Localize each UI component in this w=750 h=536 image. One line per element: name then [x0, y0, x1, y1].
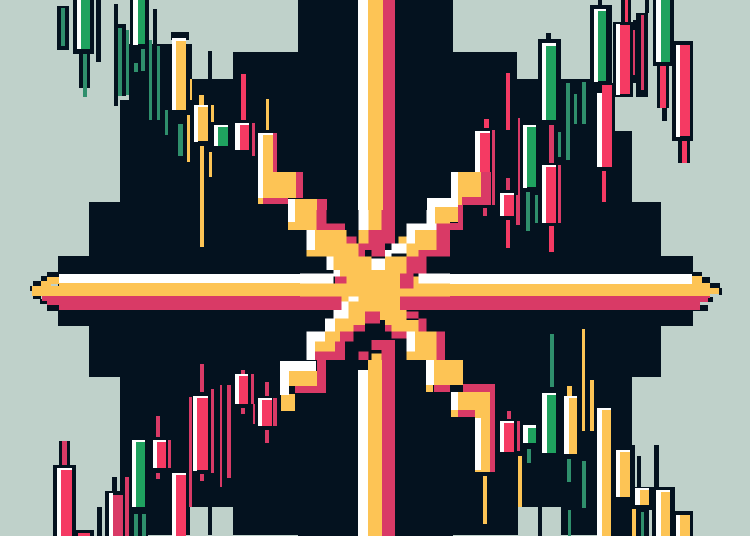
small red candle — [235, 74, 255, 156]
small outlined yellow candle — [632, 487, 655, 536]
small red candle — [500, 178, 520, 248]
green candle — [542, 334, 556, 453]
right green candle — [653, 0, 674, 121]
bottom row — [307, 332, 445, 360]
dark wicks — [96, 0, 157, 106]
outlined yellow candle — [653, 487, 675, 536]
yellow wick — [483, 476, 487, 524]
dark wicks at right — [632, 445, 659, 490]
yellow candle with long wick — [194, 95, 214, 247]
small muted green candle — [57, 6, 69, 50]
green wicks — [558, 82, 594, 160]
green candle — [132, 440, 146, 536]
candlesticks: lower left — [53, 364, 277, 536]
large green candle — [73, 0, 94, 97]
top row — [300, 210, 450, 230]
edge yellow candle — [675, 511, 693, 536]
yellow candle — [616, 450, 630, 497]
red candle — [105, 477, 129, 536]
candlesticks: upper left — [57, 0, 269, 247]
green candle — [130, 0, 149, 50]
yellow candle — [564, 329, 594, 536]
red candle — [542, 125, 561, 252]
dark wick — [208, 51, 212, 80]
tall lower red candle — [172, 473, 192, 536]
backdrop gaps at the bottom — [148, 507, 597, 536]
small red candle — [235, 370, 255, 424]
small red candle — [153, 416, 171, 479]
green candle — [523, 125, 538, 231]
yellow wick — [518, 456, 522, 507]
vertical bar: bottom — [358, 340, 395, 536]
tall red candle at edge — [53, 441, 76, 536]
upper red candle — [613, 0, 649, 97]
vertical bar: top — [358, 0, 395, 232]
central starburst — [300, 210, 450, 360]
large right red candle — [672, 41, 693, 163]
small red candle — [258, 382, 277, 443]
upper band — [307, 230, 450, 257]
tall red candle — [590, 83, 615, 202]
red candle with side wicks — [189, 364, 231, 487]
large green candle — [538, 33, 561, 125]
arrow arm: lower right staircase — [426, 360, 495, 472]
arrow arm: upper left staircase — [258, 133, 327, 230]
middle band — [300, 257, 450, 297]
horizontal bar: right — [400, 272, 722, 311]
lower thin wicks — [632, 509, 652, 536]
candlesticks: upper right — [500, 0, 693, 252]
dark wick — [97, 507, 102, 536]
candlesticks: lower right — [483, 329, 693, 536]
arrow arm: upper right staircase — [427, 119, 495, 230]
small red candle — [500, 411, 520, 452]
green wicks — [134, 40, 183, 156]
tiny red candle — [76, 530, 94, 536]
yellow wick — [266, 99, 269, 130]
top green candle — [590, 0, 612, 83]
small green candle — [523, 425, 536, 463]
small green candle — [214, 125, 228, 146]
red wicks — [506, 73, 520, 225]
tall yellow candle — [171, 32, 192, 162]
lower band — [300, 297, 450, 332]
horizontal bar: left — [30, 272, 349, 311]
arrow arm: lower left staircase — [280, 351, 326, 411]
tall yellow candle — [597, 408, 611, 536]
